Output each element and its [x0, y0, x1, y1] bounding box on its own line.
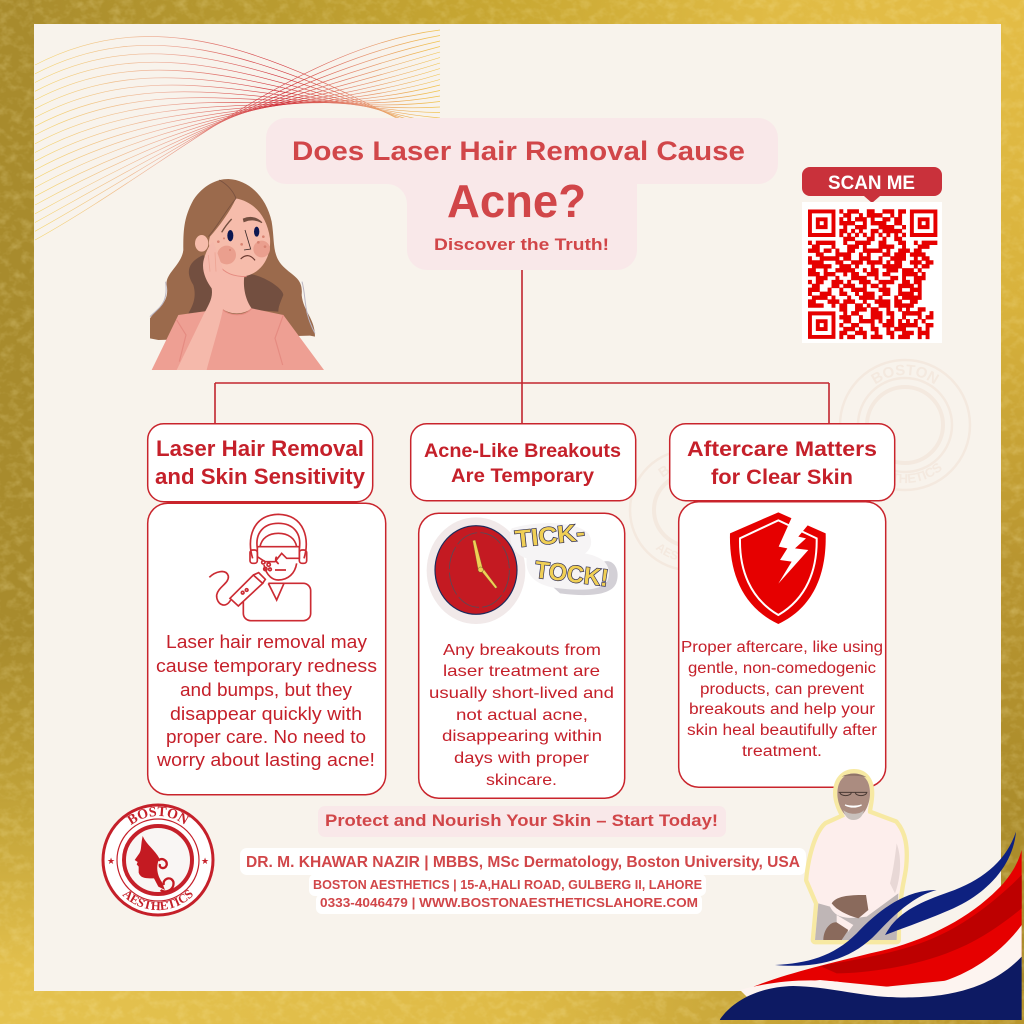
- heading: aftercare: for Clear Skin: [711, 465, 853, 489]
- text: temporary breakouts: skincare.: [486, 772, 557, 789]
- footer contact details: [240, 848, 806, 914]
- logo: Boston Aesthetics: AESTHETICS: [122, 890, 193, 910]
- text: aftercare: skin heal beautifully after: [687, 722, 877, 739]
- heading: skin sensitivity: [148, 424, 373, 502]
- text: aftercare: breakouts and help your: [689, 701, 875, 718]
- heading: temporary breakouts: Are Temporary: [451, 466, 594, 487]
- decorative watermark logo center: AESTHETICS: [656, 544, 678, 560]
- flag ribbons corner: [720, 832, 1022, 1020]
- decorative watermark logo right: BOSTON: [871, 364, 939, 384]
- heading: aftercare: [670, 424, 895, 501]
- ribbon: navy swoosh one: [775, 890, 937, 966]
- text: skin sensitivity: Laser hair removal may: [166, 632, 367, 652]
- title block: [266, 118, 778, 270]
- text: skin sensitivity: [156, 632, 377, 770]
- logo: Boston Aesthetics: ★: [201, 856, 209, 866]
- icon: tick tock clock: TICK-: [514, 519, 586, 553]
- footer call to action: [318, 806, 726, 837]
- panel: aftercare: [670, 424, 895, 787]
- heading: skin sensitivity: and Skin Sensitivity: [155, 464, 366, 489]
- heading: skin sensitivity: Laser Hair Removal: [156, 436, 364, 461]
- scan me badge: [802, 167, 942, 203]
- card: aftercare: [679, 502, 886, 787]
- footer contact details: 0333-4046479 | WWW.BOSTONAESTHETICSLAHORE.COM: [320, 896, 698, 910]
- text: skin sensitivity: worry about lasting acne!: [156, 750, 375, 770]
- decorative watermark logo center: [629, 452, 678, 570]
- text: skin sensitivity: and bumps, but they: [180, 680, 352, 700]
- scan me QR block: [802, 167, 942, 343]
- text: aftercare: treatment.: [742, 743, 822, 760]
- text: temporary breakouts: disappearing within: [442, 728, 602, 745]
- ribbon: white band: [740, 925, 1022, 1000]
- logo: Boston Aesthetics: BOSTON: [126, 806, 190, 825]
- text: skin sensitivity: cause temporary redness: [156, 656, 377, 676]
- icon: shield with lightning: [730, 512, 826, 624]
- heading: aftercare: Aftercare Matters: [687, 437, 877, 461]
- decorative watermark logo right: AESTHETICS: [896, 464, 942, 483]
- title block: Discover the Truth!: [434, 235, 609, 254]
- text: aftercare: products, can prevent: [700, 681, 865, 698]
- text: temporary breakouts: Any breakouts from: [443, 642, 601, 659]
- footer contact details: DR. M. KHAWAR NAZIR | MBBS, MSc Dermatology, Boston University, USA: [246, 854, 800, 871]
- heading: temporary breakouts: [411, 424, 636, 501]
- logo: Boston Aesthetics: ★: [107, 856, 115, 866]
- icon: laser treatment: [209, 514, 311, 621]
- icon: tick tock clock: TOCK!: [533, 556, 610, 592]
- text: temporary breakouts: laser treatment are: [443, 663, 600, 680]
- panel: temporary breakouts: [411, 424, 636, 798]
- text: skin sensitivity: disappear quickly with: [170, 704, 362, 724]
- photo: doctor: [808, 773, 905, 940]
- decorative watermark logo center: BOSTON: [658, 466, 669, 477]
- title block: Does Laser Hair Removal Cause: [292, 136, 745, 166]
- footer contact details: BOSTON AESTHETICS | 15-A,HALI ROAD, GULBERG II, LAHORE: [313, 878, 702, 892]
- decorative watermark logo right: [839, 359, 971, 491]
- text: aftercare: gentle, non-comedogenic: [688, 660, 876, 677]
- decorative wave lines: [35, 30, 440, 240]
- ribbon: dark red band: [820, 875, 1022, 973]
- title block: Acne?: [447, 175, 586, 227]
- text: skin sensitivity: proper care. No need to: [166, 727, 366, 747]
- QR code: [802, 202, 942, 343]
- card: temporary breakouts: [419, 513, 625, 798]
- heading: temporary breakouts: Acne-Like Breakouts: [424, 441, 621, 462]
- connector lines: [215, 270, 829, 424]
- text: temporary breakouts: usually short-lived and: [429, 685, 614, 702]
- text: aftercare: [681, 639, 883, 760]
- text: temporary breakouts: days with proper: [454, 750, 590, 767]
- logo: Boston Aesthetics: [102, 804, 214, 916]
- text: temporary breakouts: [429, 642, 614, 789]
- card: skin sensitivity: [148, 503, 386, 795]
- footer call to action: Protect and Nourish Your Skin – Start Today!: [325, 811, 718, 830]
- icon: tick tock clock: [427, 517, 618, 624]
- ribbon: red band: [753, 850, 1022, 987]
- panel: skin sensitivity: [148, 424, 386, 795]
- text: temporary breakouts: not actual acne,: [456, 707, 588, 724]
- ribbon: navy swoosh two: [885, 832, 1016, 935]
- scan me badge: SCAN ME: [828, 173, 915, 194]
- illustration: woman with acne: [150, 179, 324, 370]
- text: aftercare: Proper aftercare, like using: [681, 639, 883, 656]
- ribbon: navy base: [720, 957, 1022, 1020]
